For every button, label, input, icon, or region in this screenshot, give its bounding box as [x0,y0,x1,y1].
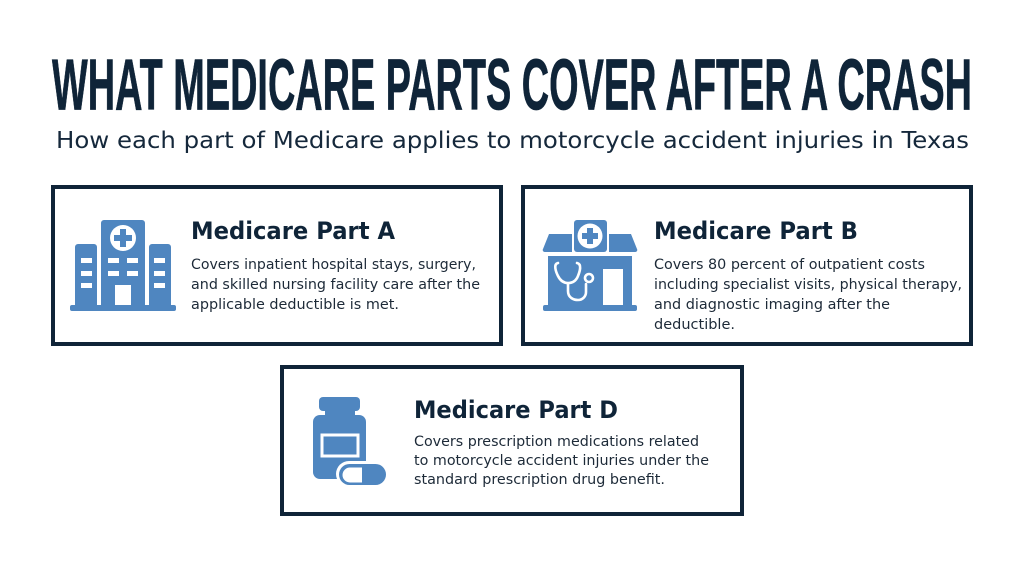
heading: Part A: Medicare Part A [191,217,395,245]
description: Part B: and diagnostic imaging after the [654,297,890,313]
description: Part A: applicable deductible is met. [191,297,399,313]
panel: Medicare Part D [282,367,742,514]
description: Part D: standard prescription drug benefit. [414,472,665,488]
subtitle: How each part of Medicare applies to motorcycle accident injuries in Texas [56,128,969,154]
description: Part A [191,257,480,313]
description: Part B: Covers 80 percent of outpatient costs [654,257,925,273]
icon: hospital building [70,220,176,311]
icon: clinic with stethoscope [543,220,637,311]
panel: Medicare Part B [523,187,971,344]
heading: Part B: Medicare Part B [654,217,858,245]
description: Part D: Covers prescription medications related [414,434,699,450]
panel: Medicare Part A [53,187,501,344]
description: Part B [654,257,962,333]
description: Part B: deductible. [654,317,735,333]
description: Part A: Covers inpatient hospital stays, surgery, [191,257,476,273]
description: Part D: to motorcycle accident injuries under the [414,453,709,469]
description: Part D [414,434,709,488]
icon: medicine bottle and capsule [313,397,388,487]
heading: Part D: Medicare Part D [414,396,618,424]
description: Part A: and skilled nursing facility care after the [191,277,480,293]
description: Part B: including specialist visits, physical therapy, [654,277,962,293]
